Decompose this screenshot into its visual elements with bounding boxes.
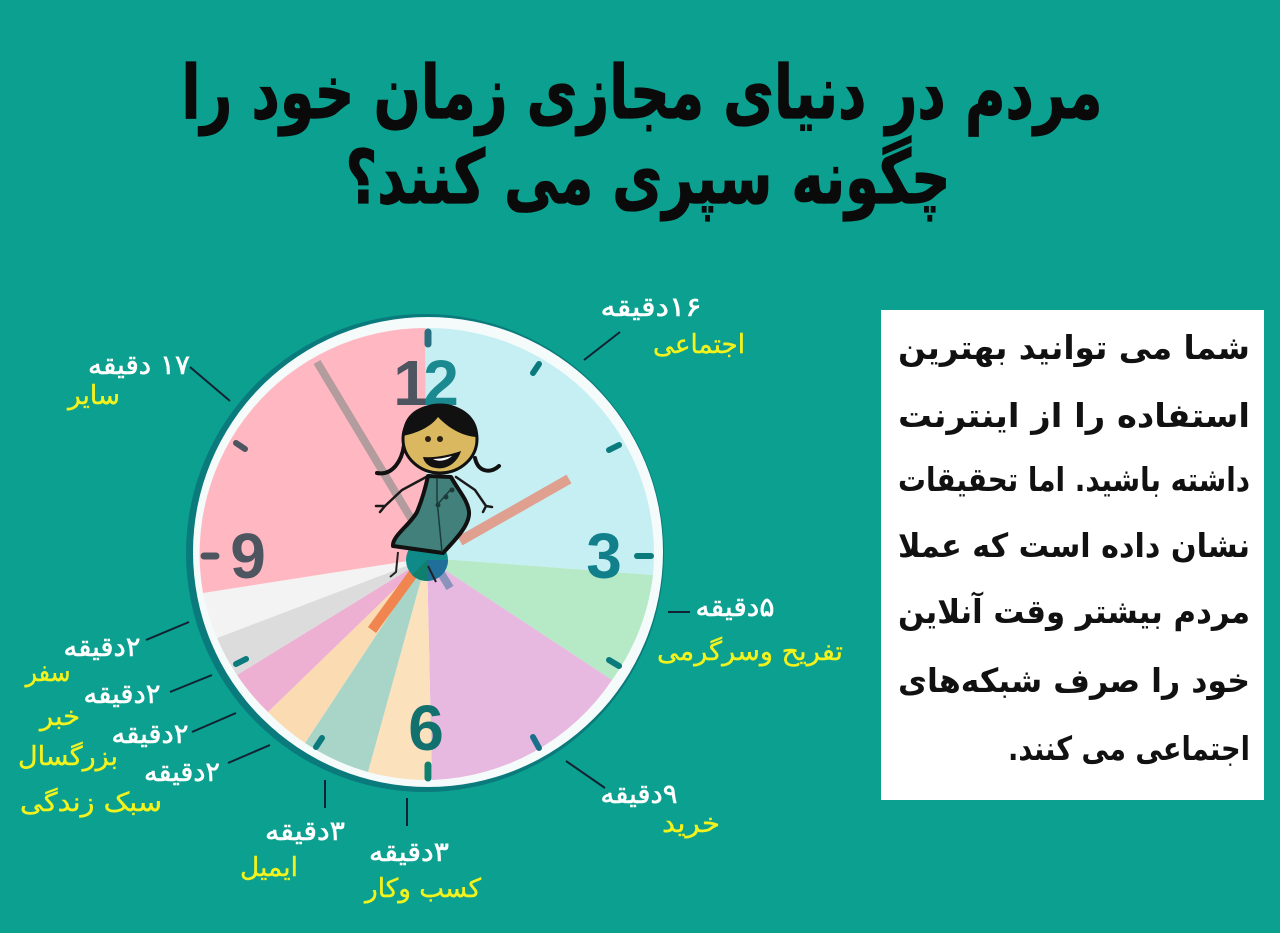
label: business 3 minutes: ۳دقیقه <box>369 837 449 868</box>
hair <box>403 404 478 437</box>
label: other 17 minutes: سایر <box>66 381 120 411</box>
label: lifestyle 2 minutes: ۲دقیقه <box>144 757 220 788</box>
label: news 2 minutes: ۲دقیقه <box>84 679 160 710</box>
label: entertainment 5 minutes: ۵دقیقه <box>696 592 774 623</box>
label: travel 2 minutes: سفر <box>24 658 71 688</box>
label: other 17 minutes: ۱۷ دقیقه <box>88 350 190 381</box>
hour ticks <box>204 332 651 778</box>
label: news 2 minutes: خبر <box>38 702 80 732</box>
label: shopping 9 minutes: خرید <box>662 809 720 839</box>
icon: girl character <box>376 404 499 582</box>
text panel: شما می توانید بهترین <box>898 328 1250 368</box>
head <box>403 405 477 473</box>
clock numerals: 6 <box>408 692 444 764</box>
text panel: مردم بیشتر وقت آنلاین <box>898 591 1250 632</box>
label: business 3 minutes: کسب وکار <box>363 874 482 904</box>
clock hands <box>317 362 569 630</box>
mouth <box>423 451 461 468</box>
label: travel 2 minutes: ۲دقیقه <box>64 632 140 663</box>
clock numerals: 9 <box>230 520 266 592</box>
label: adult 2 minutes <box>18 713 236 772</box>
label: lifestyle 2 minutes <box>20 745 270 818</box>
legs <box>390 552 436 582</box>
label: email 3 minutes: ۳دقیقه <box>265 816 345 847</box>
label: shopping 9 minutes: ۹دقیقه <box>600 779 678 810</box>
label: adult 2 minutes: بزرگسال <box>18 741 118 772</box>
label: entertainment 5 minutes: تفریح وسرگرمی <box>657 636 843 667</box>
label: email 3 minutes: ایمیل <box>240 853 298 883</box>
dress <box>393 476 469 553</box>
label: business 3 minutes <box>363 798 482 904</box>
pie wedges <box>200 328 654 780</box>
label: travel 2 minutes <box>24 622 189 688</box>
label: email 3 minutes <box>240 780 345 883</box>
text panel: نشان داده است که عملا <box>898 526 1250 565</box>
clock numerals: 2 <box>423 347 459 419</box>
label: news 2 minutes <box>38 675 212 732</box>
clock centre hub <box>406 539 448 581</box>
label: lifestyle 2 minutes: سبک زندگی <box>20 787 162 818</box>
text panel <box>881 310 1264 800</box>
eyes <box>425 436 443 442</box>
label: social 16 minutes: اجتماعی <box>653 330 745 360</box>
label: entertainment 5 minutes <box>657 592 843 667</box>
title <box>182 50 1102 222</box>
clock rim <box>186 314 664 792</box>
arms <box>376 476 492 512</box>
text panel: استفاده را از اینترنت <box>898 396 1250 436</box>
label: social 16 minutes <box>584 292 745 360</box>
title: چگونه سپری می کنند؟ <box>346 135 950 222</box>
label: adult 2 minutes: ۲دقیقه <box>112 719 188 750</box>
label: social 16 minutes: ۱۶دقیقه <box>600 292 702 323</box>
clock numerals: 3 <box>586 520 622 592</box>
clock numerals <box>230 347 622 764</box>
label: shopping 9 minutes <box>566 761 720 839</box>
hair tails <box>377 445 499 473</box>
panel: clock <box>186 314 664 792</box>
text panel: خود را صرف شبکه‌های <box>898 661 1250 701</box>
clock numerals: 1 <box>393 347 429 419</box>
label: other 17 minutes <box>66 350 230 411</box>
